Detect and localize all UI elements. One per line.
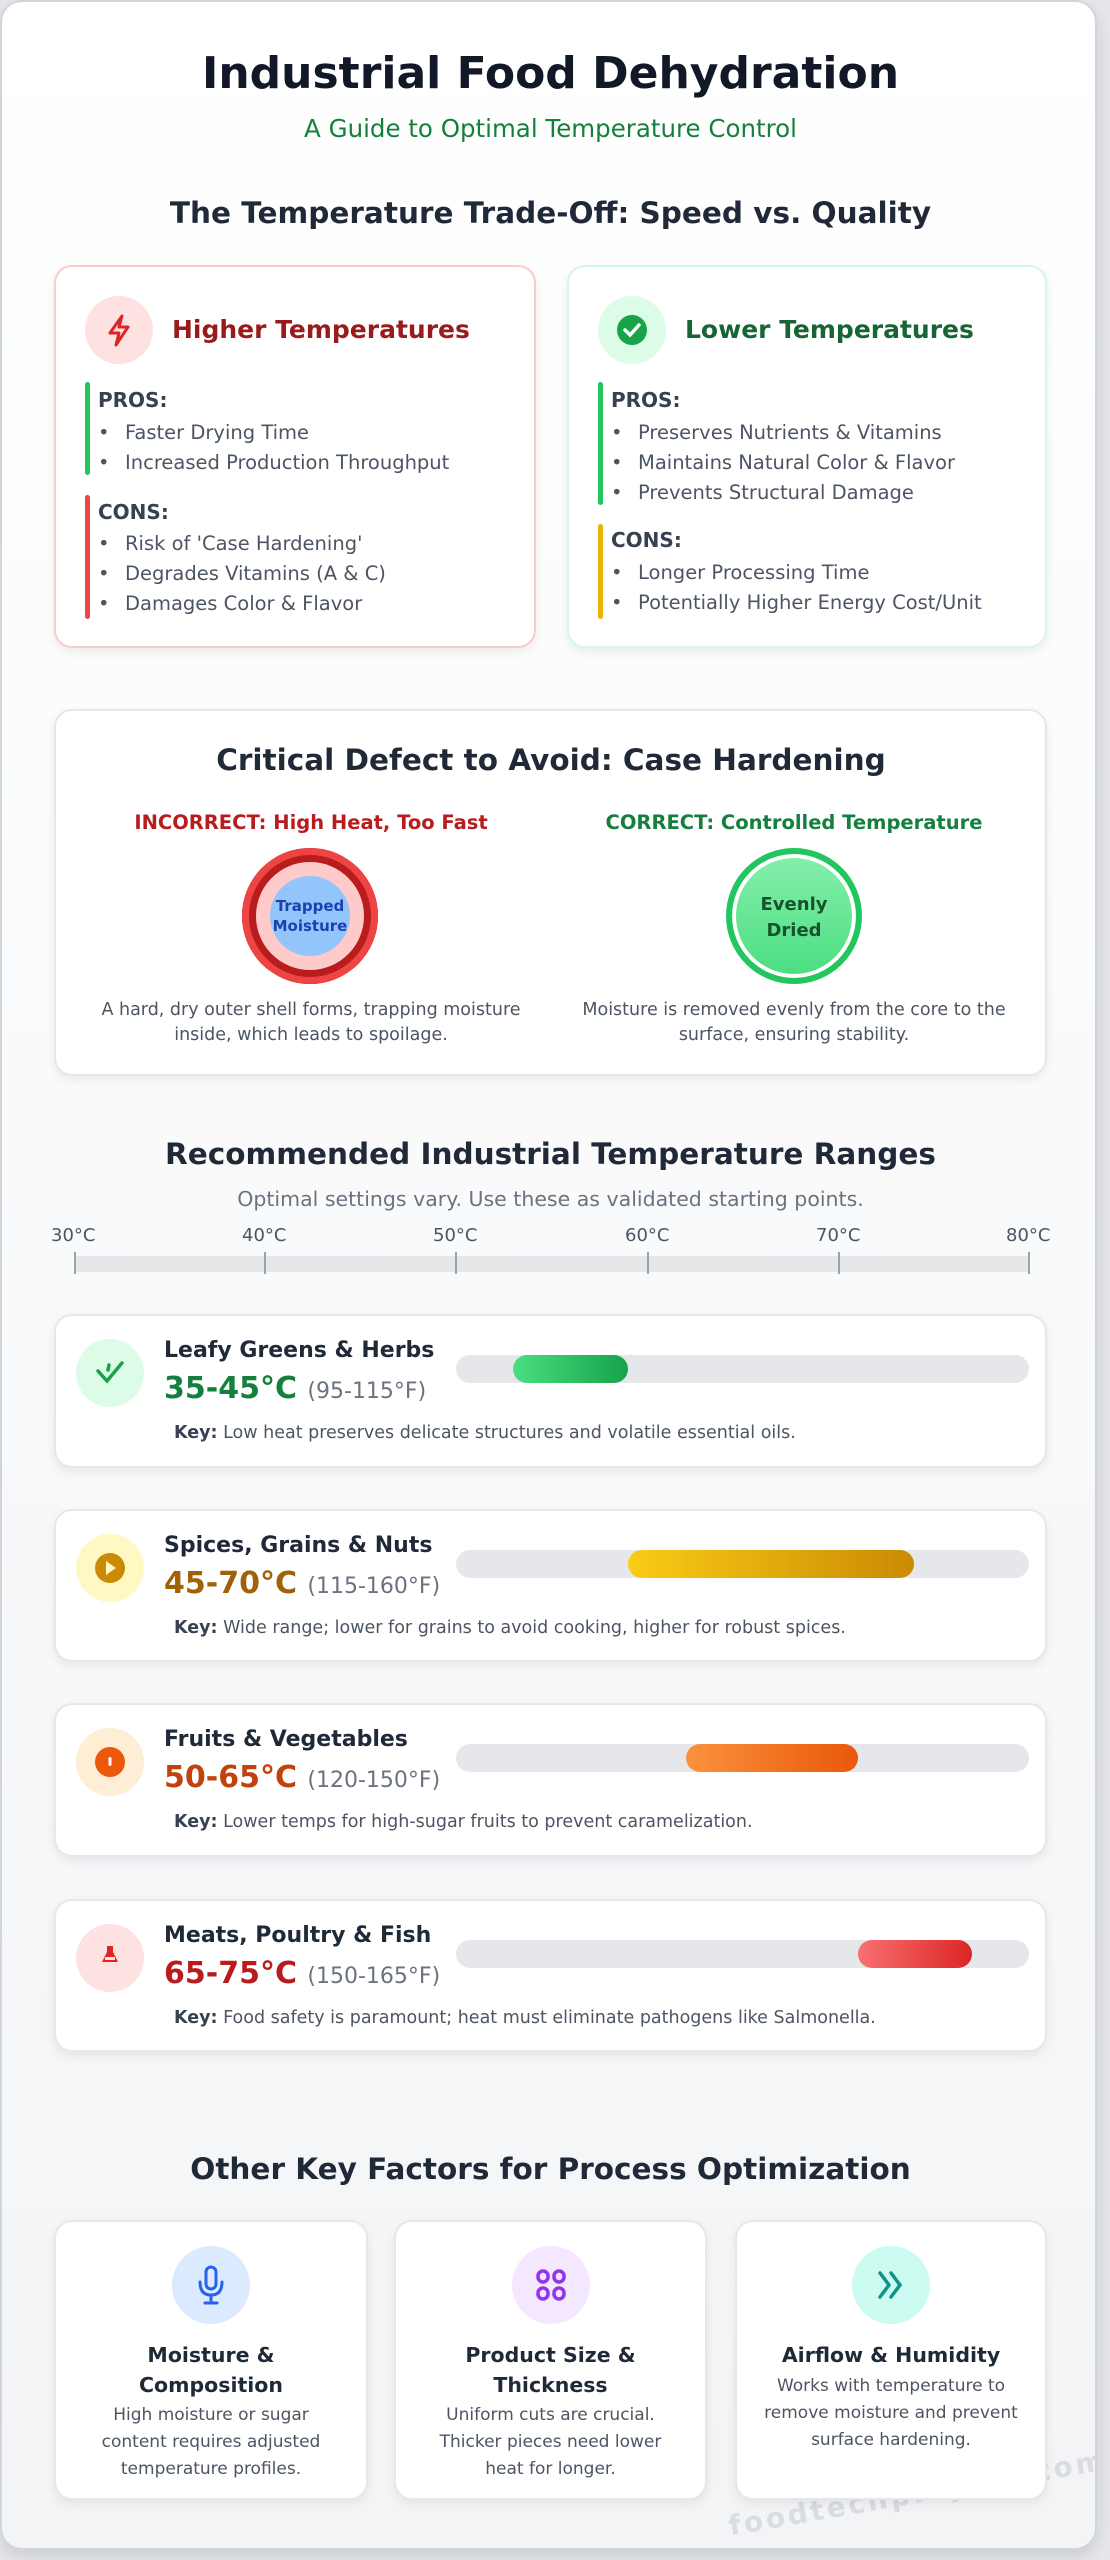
temperature scale: 50°C [433, 1225, 477, 1246]
factor: size: Product Size & [465, 2343, 636, 2367]
card: leafy greens [54, 1314, 1047, 1468]
heading: trade-off: The Temperature Trade-Off: Speed vs. Quality [170, 196, 931, 230]
diagram: evenly dried [726, 848, 862, 984]
card: spices: 45-70°C (115-160°F) [164, 1566, 440, 1601]
card: meats [54, 1899, 1047, 2052]
card: fruits [54, 1703, 1047, 1857]
factor: moisture: Moisture & [147, 2343, 275, 2367]
pros [85, 382, 449, 475]
factor: airflow: Works with temperature to remove moisture and prevent surface hardening. [764, 2376, 1018, 2450]
icon: play [76, 1534, 144, 1602]
card: leafy greens: Key: Low heat preserves delicate structures and volatile essential oils. [174, 1423, 796, 1443]
heading: Critical Defect to Avoid: Case Hardening [216, 743, 886, 777]
temperature scale: 80°C [1006, 1225, 1050, 1246]
range bar [456, 1744, 1029, 1772]
heading: ranges: Recommended Industrial Temperature Ranges [165, 1137, 936, 1171]
pros [598, 382, 955, 505]
range bar [456, 1940, 1029, 1968]
icon: fruit [76, 1728, 144, 1796]
cons: Degrades Vitamins (A & C) [125, 562, 386, 585]
card: spices: Spices, Grains & Nuts [164, 1533, 432, 1558]
icon: check [598, 296, 666, 364]
icon: leaf [76, 1339, 144, 1407]
pros: Faster Drying Time [125, 421, 309, 444]
diagram: trapped moisture: Moisture [273, 917, 347, 935]
temperature scale: 60°C [625, 1225, 669, 1246]
subtitle: A Guide to Optimal Temperature Control [304, 114, 797, 143]
cons: Risk of 'Case Hardening' [125, 532, 362, 555]
card: fruits: Key: Lower temps for high-sugar fruits to prevent caramelization. [174, 1812, 753, 1832]
card: meats: Meats, Poultry & Fish [164, 1923, 431, 1948]
panel: higher temperatures [54, 265, 536, 648]
factor: moisture: High moisture or sugar content requires adjusted temperature profiles. [102, 2405, 320, 2479]
temperature scale: 40°C [242, 1225, 286, 1246]
cons [598, 524, 982, 619]
heading: other factors: Other Key Factors for Process Optimization [190, 2152, 911, 2186]
factor: size: Thickness [493, 2373, 608, 2397]
pros: Preserves Nutrients & Vitamins [638, 421, 942, 444]
factor: size [394, 2220, 707, 2500]
heading: Higher Temperatures [172, 315, 470, 344]
icon: meat [76, 1924, 144, 1992]
icon: mic [172, 2246, 250, 2324]
panel: lower temperatures [567, 265, 1047, 648]
incorrect label: INCORRECT: High Heat, Too Fast [134, 811, 488, 834]
temperature scale: 70°C [816, 1225, 860, 1246]
temperature scale: 30°C [51, 1225, 95, 1246]
card: meats: Key: Food safety is paramount; heat must eliminate pathogens like Salmonella. [174, 2008, 876, 2028]
cons: CONS: [98, 500, 169, 524]
diagram: trapped moisture [242, 848, 378, 984]
icon: lightning [85, 296, 153, 364]
panel: case hardening [54, 709, 1047, 1076]
diagram: trapped moisture: Trapped [276, 897, 344, 915]
heading: Lower Temperatures [685, 315, 974, 344]
card: meats: 65-75°C (150-165°F) [164, 1956, 440, 1991]
range bar [456, 1355, 1029, 1383]
diagram: evenly dried: Evenly [761, 894, 827, 915]
correct description: Moisture is removed evenly from the core to the surface, ensuring stability. [582, 1000, 1006, 1045]
temperature scale [51, 1225, 1050, 1274]
correct label: CORRECT: Controlled Temperature [606, 811, 982, 834]
factor: airflow [735, 2220, 1047, 2500]
incorrect description: A hard, dry outer shell forms, trapping moisture inside, which leads to spoilage. [101, 1000, 521, 1045]
diagram: evenly dried: Dried [766, 920, 822, 941]
cons: Potentially Higher Energy Cost/Unit [638, 591, 982, 614]
icon: grid [512, 2246, 590, 2324]
card: fruits: Fruits & Vegetables [164, 1727, 408, 1752]
subtitle: ranges: Optimal settings vary. Use these as validated starting points. [237, 1187, 864, 1211]
cons: Longer Processing Time [638, 561, 869, 584]
pros: Maintains Natural Color & Flavor [638, 451, 955, 474]
factor: size: Uniform cuts are crucial. Thicker pieces need lower heat for longer. [440, 2405, 661, 2479]
cons: CONS: [611, 528, 682, 552]
card: spices: Key: Wide range; lower for grains to avoid cooking, higher for robust spices. [174, 1618, 846, 1638]
cons: Damages Color & Flavor [125, 592, 362, 615]
factor: moisture [54, 2220, 368, 2500]
cons [85, 495, 386, 619]
title: Industrial Food Dehydration [202, 48, 899, 99]
factor: moisture: Composition [139, 2373, 283, 2397]
factor: airflow: Airflow & Humidity [782, 2343, 1000, 2367]
card: leafy greens: Leafy Greens & Herbs [164, 1338, 434, 1363]
card: leafy greens: 35-45°C (95-115°F) [164, 1371, 426, 1406]
pros: Increased Production Throughput [125, 451, 449, 474]
icon: chevrons [852, 2246, 930, 2324]
range bar [456, 1550, 1029, 1578]
pros: Prevents Structural Damage [638, 481, 914, 504]
card: spices [54, 1509, 1047, 1662]
card: fruits: 50-65°C (120-150°F) [164, 1760, 440, 1795]
pros: PROS: [98, 388, 167, 412]
pros: PROS: [611, 388, 680, 412]
